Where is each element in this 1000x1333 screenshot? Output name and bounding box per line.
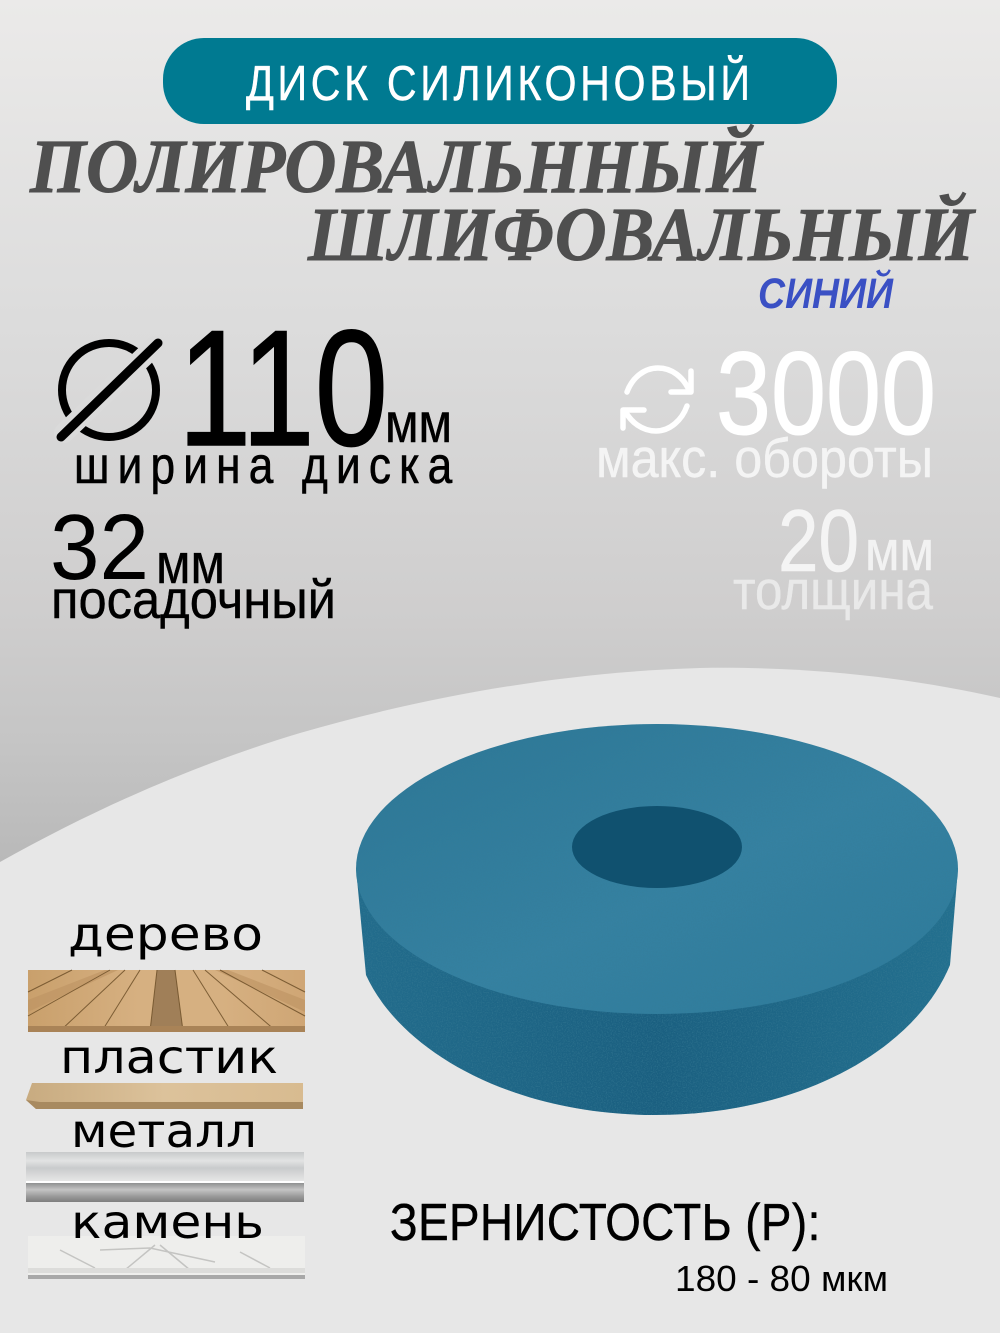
spec: max speed: 3000 <box>716 328 936 460</box>
spec: bore: мм <box>156 532 225 596</box>
lower curved panel <box>0 668 1000 1333</box>
colour label: СИНИЙ <box>758 268 894 318</box>
material: stone swatch <box>28 1236 305 1279</box>
material: wood swatch <box>28 970 305 1032</box>
spec: disc diameter: ширина диска <box>74 437 452 495</box>
material: plastic label: пластик <box>60 1030 278 1084</box>
grit heading: ЗЕРНИСТОСТЬ (Р): <box>390 1194 820 1252</box>
heading: polishing: ПОЛИРОВАЛЬННЫЙ <box>29 124 765 209</box>
spec: max speed <box>596 328 936 489</box>
spec: disc diameter: 110 <box>178 296 388 480</box>
material: plastic swatch <box>26 1083 303 1109</box>
product photo: blue disc <box>356 724 958 1115</box>
spec: bore: 32 <box>50 495 149 599</box>
spec: disc diameter <box>61 296 452 495</box>
material: metal label: металл <box>71 1104 257 1158</box>
spec: thickness: толщина <box>733 559 933 621</box>
spec: disc diameter: мм <box>385 391 452 454</box>
spec: thickness: мм <box>865 519 934 583</box>
icon: diameter symbol <box>61 343 158 437</box>
material: wood label: дерево <box>68 907 263 961</box>
spec: thickness <box>733 491 934 621</box>
title pill <box>163 38 837 124</box>
material: stone label: камень <box>71 1195 264 1249</box>
spec: thickness: 20 <box>778 491 859 590</box>
background gradient <box>0 0 1000 880</box>
material: metal swatch <box>26 1152 304 1202</box>
spec: bore: посадочный <box>51 570 336 630</box>
spec: max speed: макс. обороты <box>596 427 933 489</box>
spec: bore <box>50 495 336 630</box>
heading: grinding: ШЛИФОВАЛЬНЫЙ <box>307 192 977 277</box>
grit value: 180 - 80 мкм <box>675 1258 888 1299</box>
title pill: ДИСК СИЛИКОНОВЫЙ <box>246 56 750 111</box>
icon: rotation arrows <box>623 368 691 431</box>
